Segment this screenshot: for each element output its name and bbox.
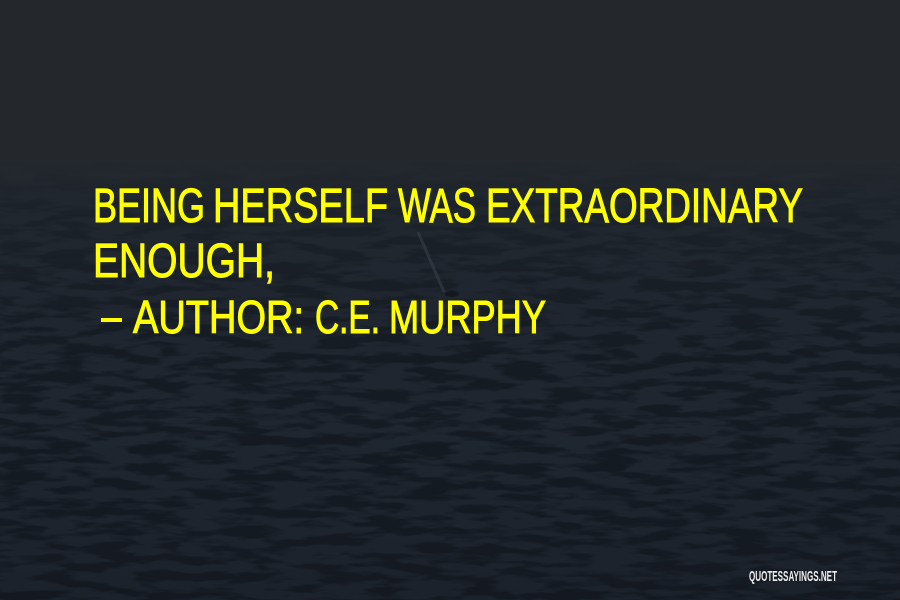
author attribution: MURPHY	[389, 291, 546, 343]
quote line 2: ENOUGH,	[93, 235, 275, 288]
quote line 1: EXTRAORDINARY	[486, 180, 803, 233]
author attribution: AUTHOR:	[133, 291, 304, 343]
author attribution	[101, 291, 546, 343]
quote line 1: HERSELF	[213, 180, 388, 233]
quote line 1: WAS	[398, 180, 476, 233]
faint sailboat trail	[418, 232, 459, 297]
quote line 1	[93, 180, 803, 233]
background: dark sea photograph	[0, 232, 900, 600]
quote line 1: BEING	[93, 180, 205, 233]
author attribution: C.E.	[315, 291, 380, 343]
quote text	[93, 180, 803, 288]
